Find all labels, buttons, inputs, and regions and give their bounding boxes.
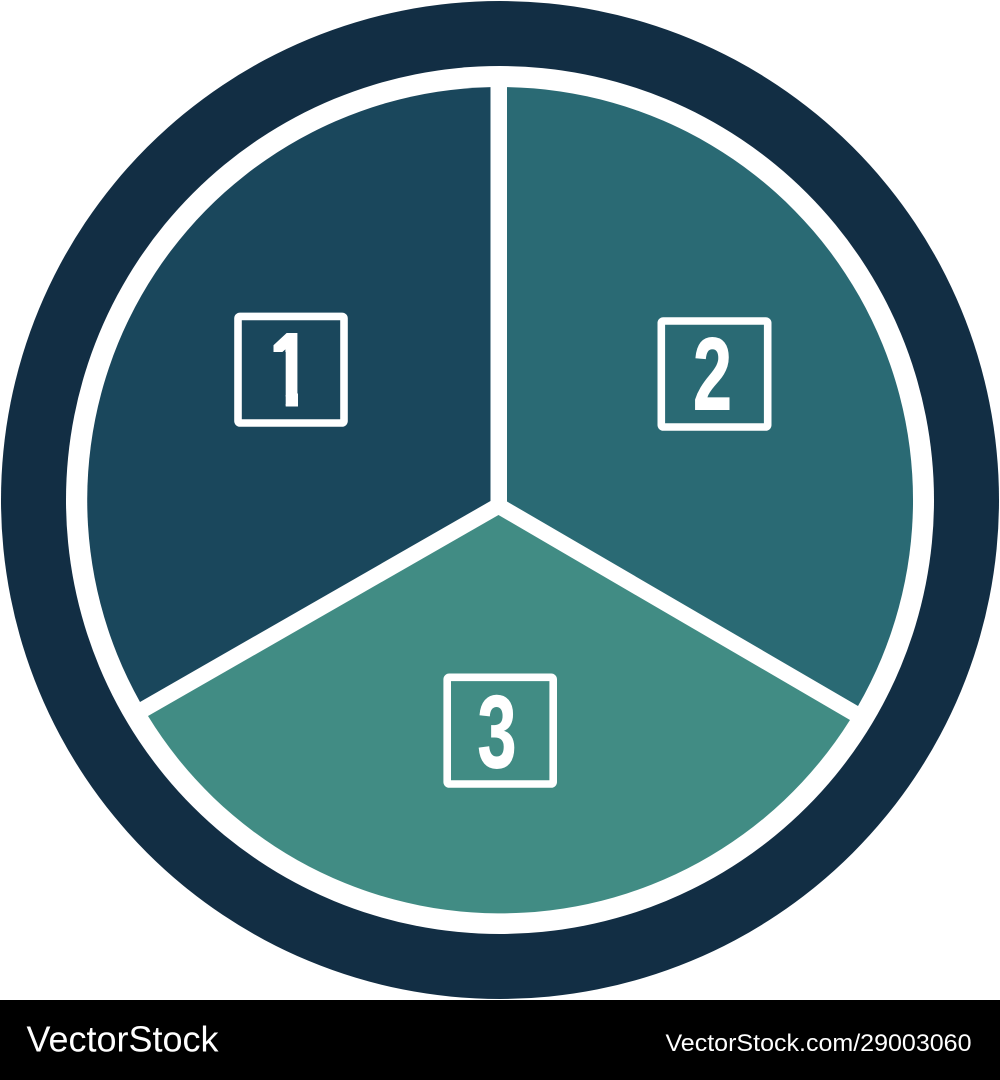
label box 3 xyxy=(447,674,553,790)
numeral 3: 3 xyxy=(478,674,516,790)
label box 2 xyxy=(661,316,768,432)
brand name: VectorStock xyxy=(26,1018,219,1060)
segment 1 xyxy=(87,87,490,702)
numeral 2: 2 xyxy=(693,316,732,432)
label box 1 xyxy=(238,313,344,428)
footer bar xyxy=(0,1000,1000,1080)
segment 2 xyxy=(507,87,913,706)
numeral 1: 1 xyxy=(270,313,310,428)
image url: VectorStock.com/29003060 xyxy=(666,1030,972,1057)
segment 3 xyxy=(148,515,850,913)
